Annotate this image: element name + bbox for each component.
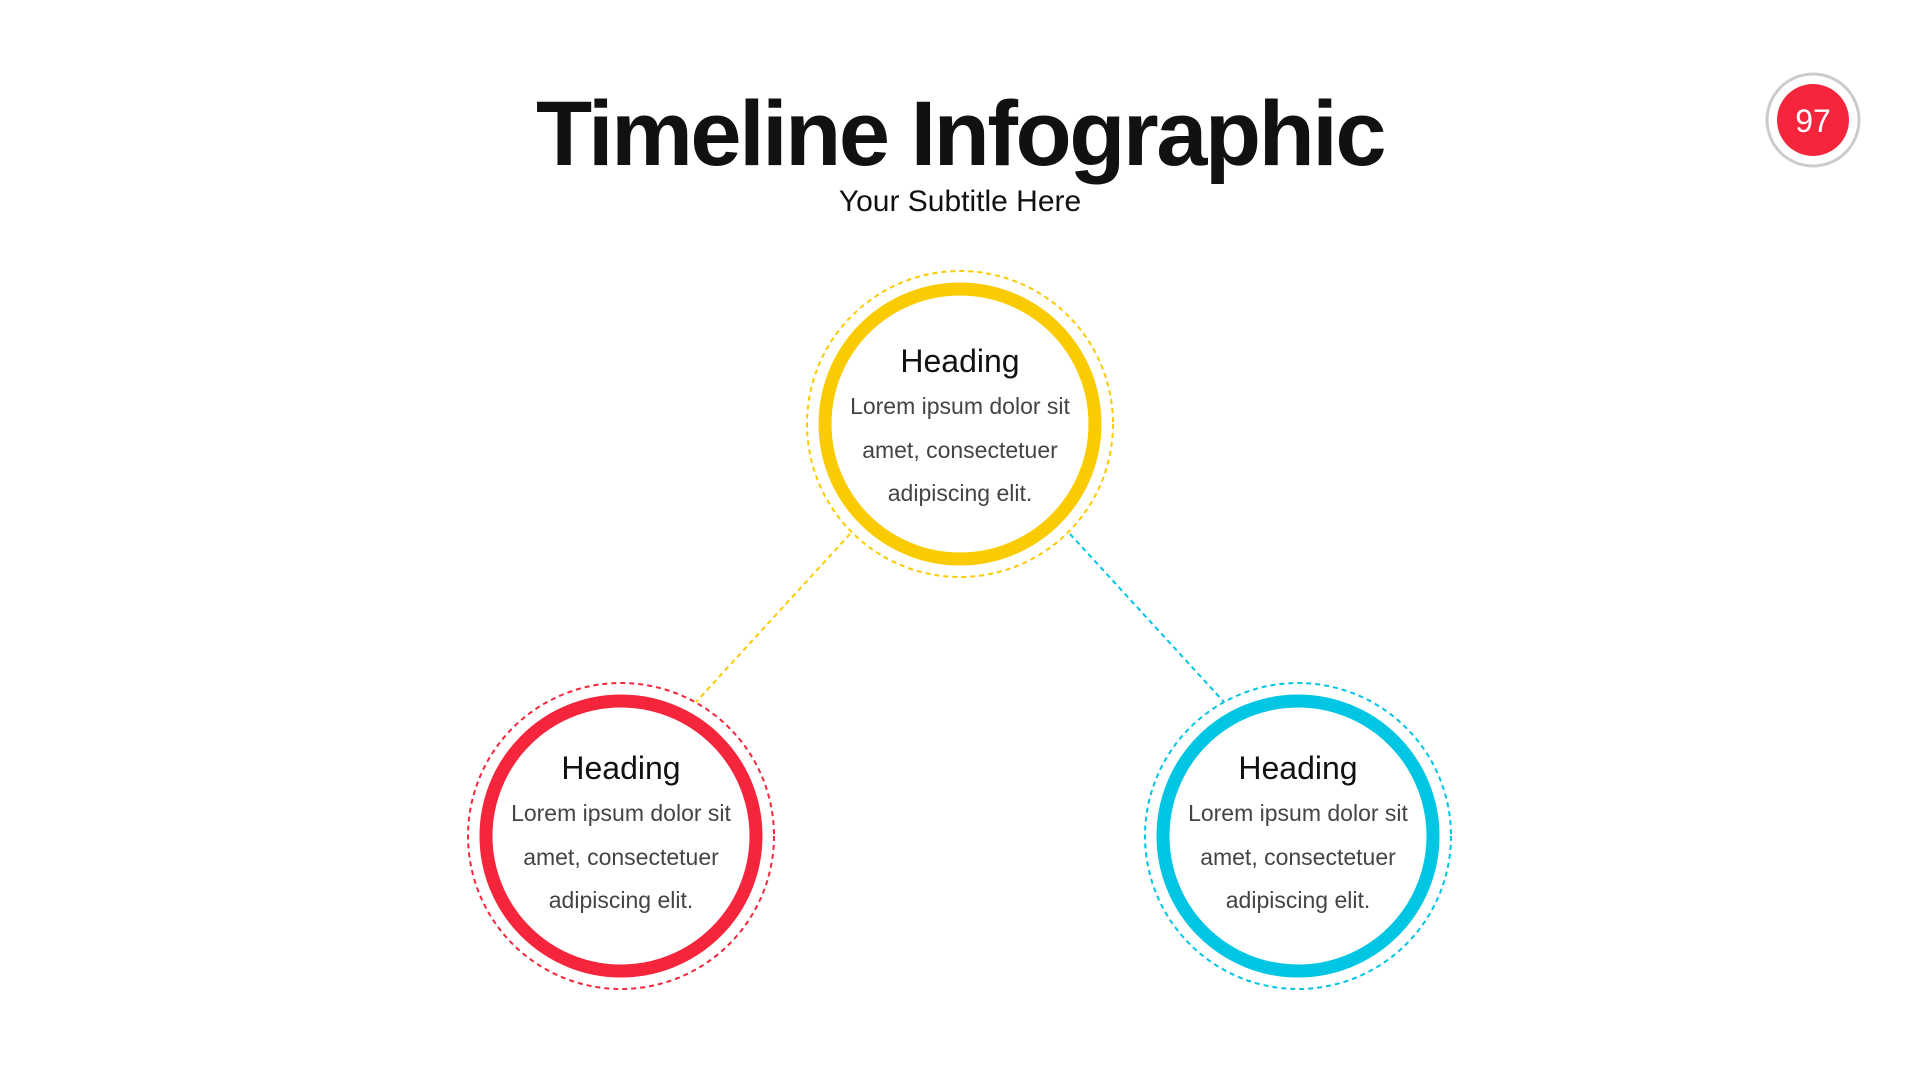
circle: right cyan: adipiscing elit. [1226, 887, 1370, 913]
subtitle: Your Subtitle Here [839, 185, 1081, 218]
circle: right cyan: Lorem ipsum dolor sit [1188, 800, 1409, 826]
circle: top yellow: Heading [900, 343, 1020, 379]
circle: right cyan [1145, 683, 1451, 989]
circle: right cyan: Heading [1238, 750, 1358, 786]
connector: cyan [1070, 534, 1224, 702]
circle: top yellow: amet, consectetuer [862, 437, 1058, 463]
badge: page number [1767, 74, 1859, 166]
circle: left red: amet, consectetuer [523, 844, 719, 870]
circle: left red [468, 683, 774, 989]
circle: left red: Heading [561, 750, 681, 786]
connector: yellow [696, 534, 850, 702]
circle: right cyan: amet, consectetuer [1200, 844, 1396, 870]
circle: top yellow: Lorem ipsum dolor sit [850, 393, 1071, 419]
circle: left red: adipiscing elit. [549, 887, 693, 913]
circle: top yellow [807, 271, 1113, 577]
badge: page number: 97 [1795, 103, 1831, 139]
circle: top yellow: adipiscing elit. [888, 480, 1032, 506]
title: Timeline Infographic [536, 83, 1384, 185]
circle: left red: Lorem ipsum dolor sit [511, 800, 732, 826]
